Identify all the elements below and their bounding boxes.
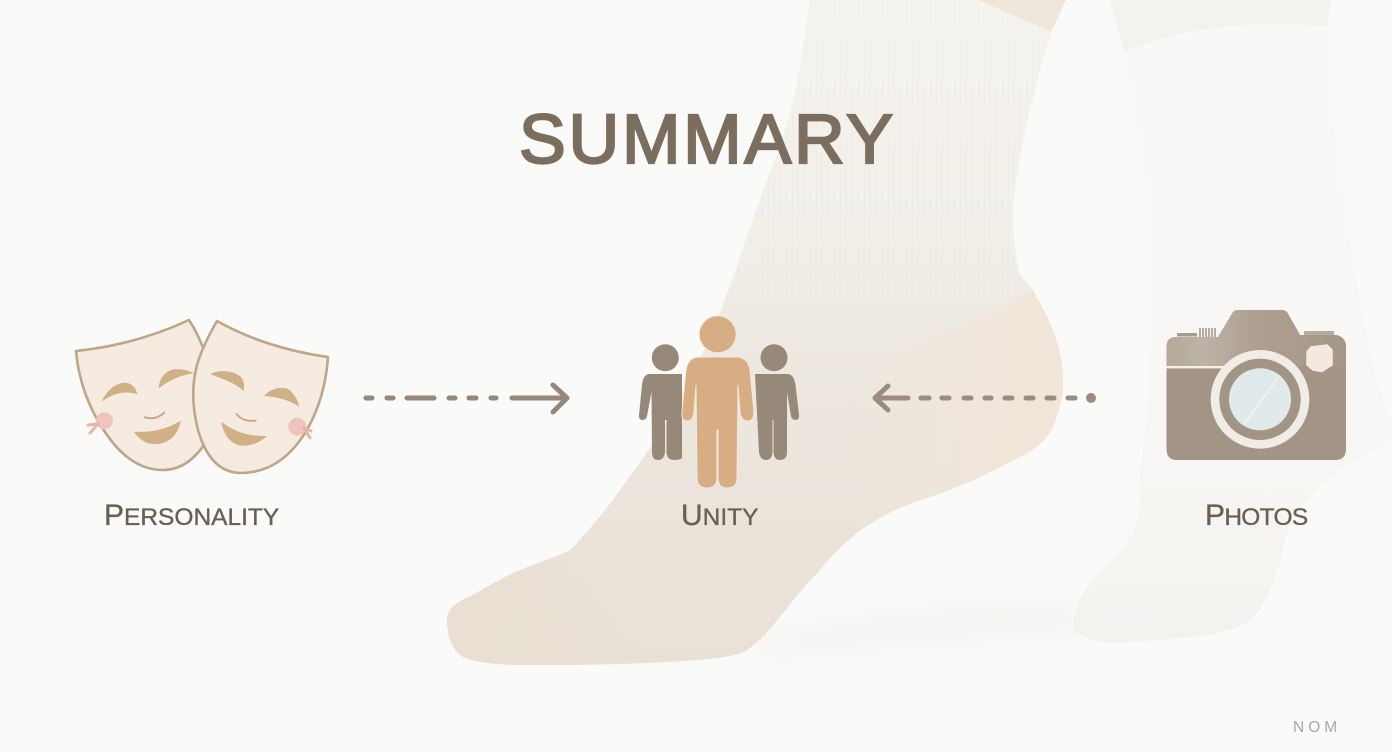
photo: foot shadow (760, 610, 1075, 652)
label: photos: PHOTOS (1205, 499, 1308, 532)
person: centre (682, 316, 754, 488)
arrow: personality to unity (366, 385, 567, 412)
photo: right sock (1073, 0, 1392, 642)
arrow: photos to unity (875, 386, 1094, 410)
person: left (639, 344, 682, 460)
icon: theatre masks (76, 320, 328, 473)
icon: three people (639, 316, 799, 488)
icon: camera (1166, 310, 1346, 460)
person: right (755, 344, 799, 460)
label: personality: PERSONALITY (104, 499, 279, 532)
panel: personality (76, 320, 328, 532)
panel: unity (639, 316, 799, 532)
panel: photos (1166, 310, 1346, 532)
left mask (76, 320, 206, 470)
right mask (193, 321, 328, 473)
title: SUMMARY (519, 100, 893, 178)
label: unity: UNITY (681, 499, 758, 532)
photo: main sock (440, 0, 1080, 670)
watermark: NOM: NOM (1293, 719, 1341, 736)
photo: skin above main sock (978, 0, 1066, 32)
